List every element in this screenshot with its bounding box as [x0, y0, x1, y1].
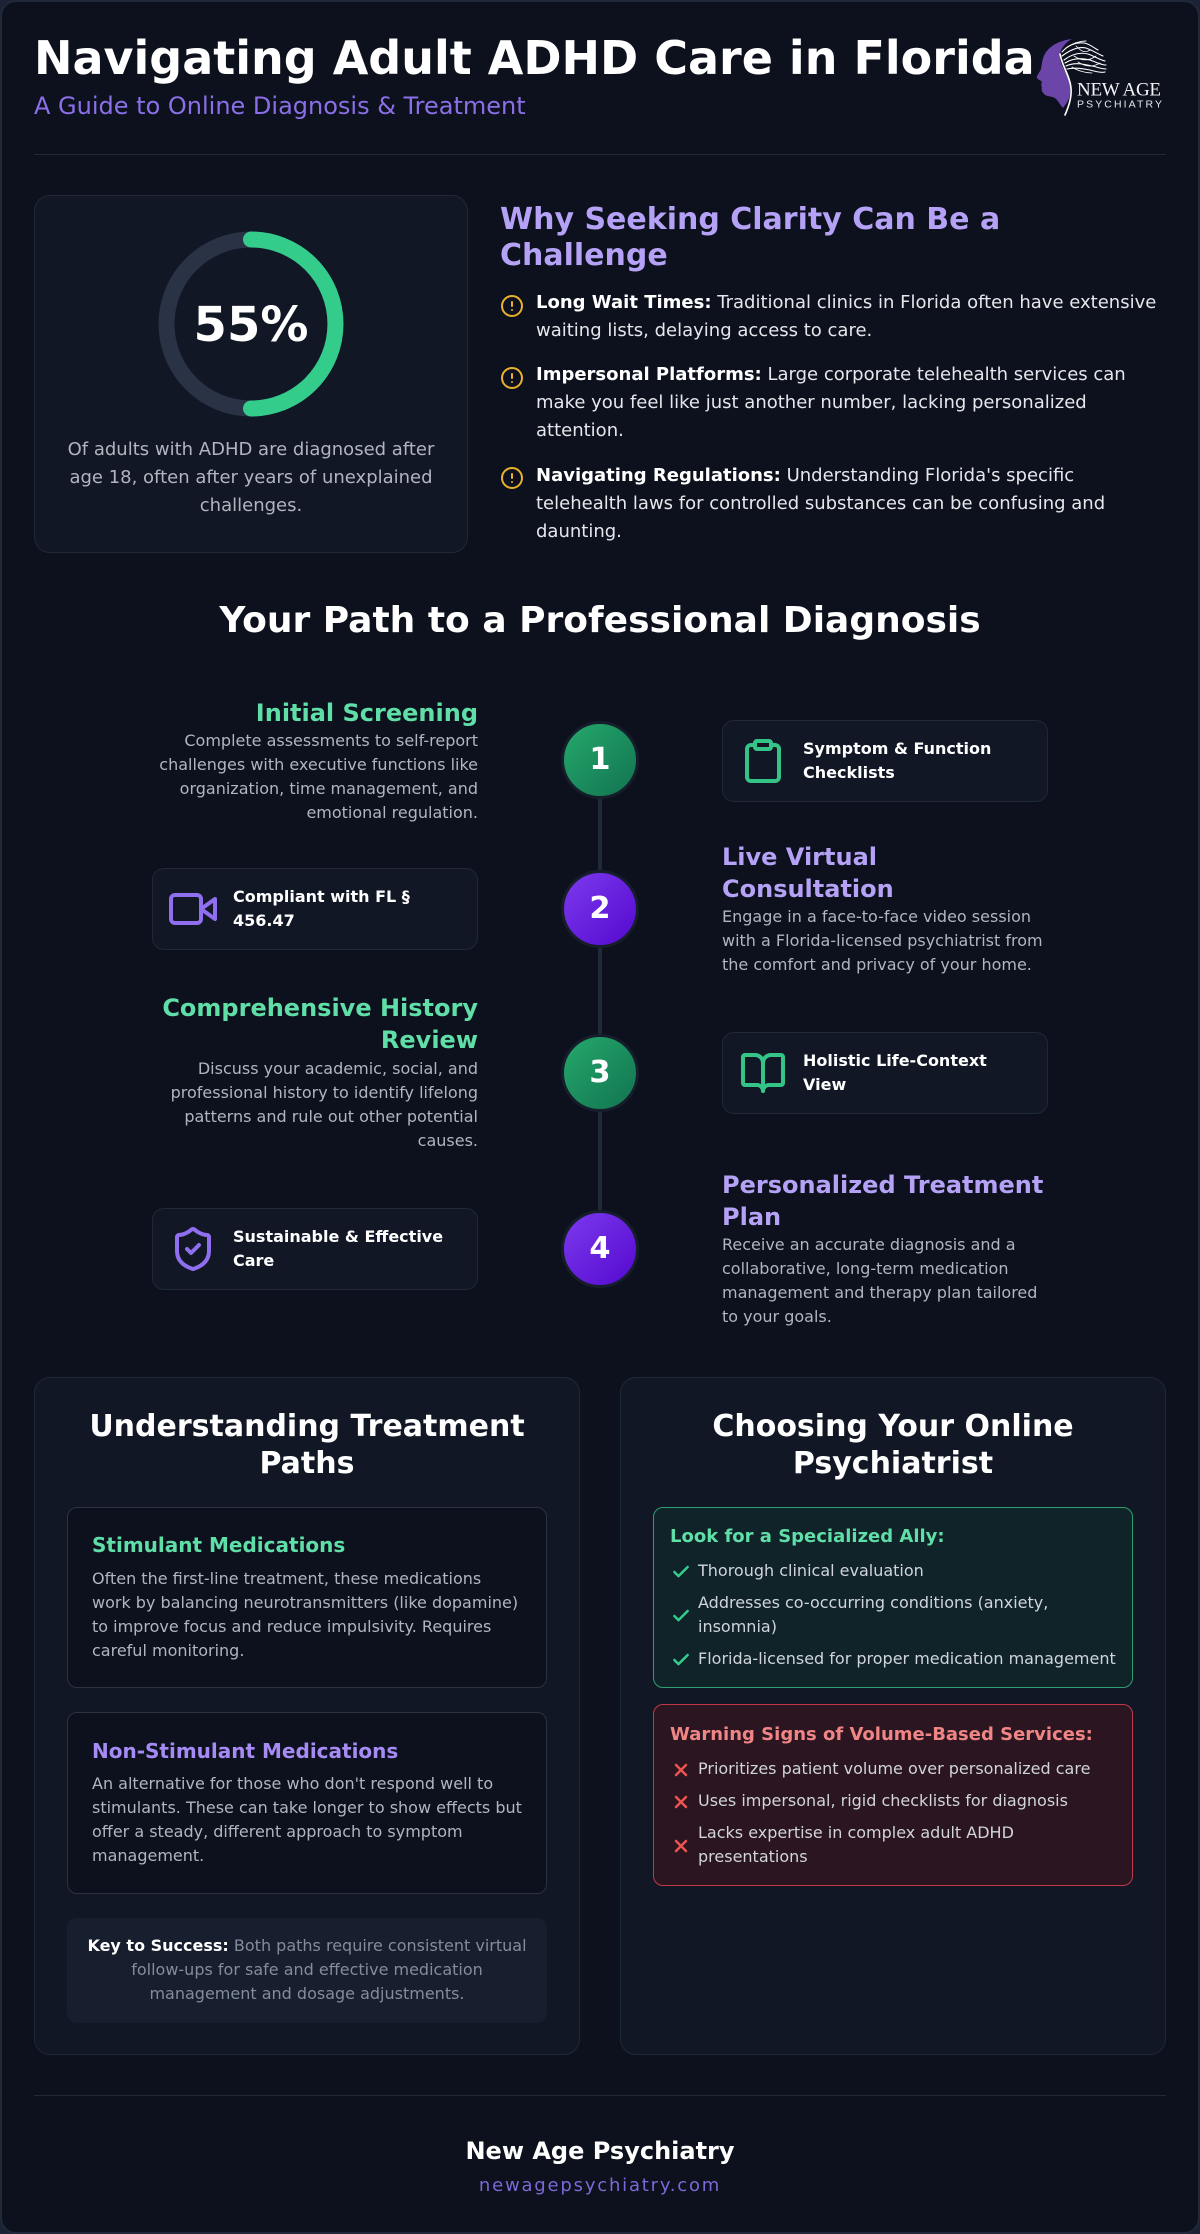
- icon: check: [673, 1610, 689, 1622]
- text: management and therapy plan tailored: [722, 1283, 1037, 1302]
- panel heading: Paths: [260, 1446, 354, 1480]
- list item: Addresses co-occurring conditions (anxiety,: [698, 1593, 1048, 1612]
- card label: Care: [233, 1251, 274, 1270]
- card body: [92, 1569, 518, 1660]
- timeline connector: [598, 760, 602, 1250]
- text: Live Virtual: [722, 843, 877, 871]
- challenge: impersonal platforms: Impersonal Platforms: Large corporate telehealth services can: [536, 364, 1126, 385]
- list item: insomnia): [698, 1617, 777, 1636]
- heading: your path: Your Path to a Professional Diagnosis: [219, 600, 981, 641]
- logo: New Age Psychiatry: PSYCHIATRY: [1077, 98, 1162, 110]
- list item: [698, 1823, 1014, 1866]
- text: Personalized Treatment: [722, 1171, 1043, 1199]
- text: Complete assessments to self-report: [184, 731, 478, 750]
- text: emotional regulation.: [306, 803, 478, 822]
- icon: alert navigating regulations: [501, 467, 523, 489]
- challenge: long wait times: waiting lists, delaying access to care.: [536, 320, 872, 341]
- logo: New Age Psychiatry: [1036, 39, 1162, 116]
- icon: check: [673, 1654, 689, 1666]
- card label: [233, 1227, 443, 1270]
- text: Initial Screening: [256, 699, 478, 727]
- list item: Lacks expertise in complex adult ADHD: [698, 1823, 1014, 1842]
- step 4 text: [722, 1171, 1043, 1326]
- text: to your goals.: [722, 1307, 832, 1326]
- list item: Prioritizes patient volume over personalized care: [698, 1759, 1090, 1778]
- text: patterns and rule out other potential: [184, 1107, 478, 1126]
- card body: stimulants. These can take longer to show effects but: [92, 1798, 522, 1817]
- box title: Look for a Specialized Ally:: [670, 1526, 945, 1547]
- challenge: impersonal platforms: make you feel like just another number, lacking personalized: [536, 392, 1087, 413]
- panel heading: [712, 1409, 1074, 1480]
- box: specialized ally: [653, 1507, 1133, 1688]
- step 2 number: 2: [589, 891, 611, 926]
- challenge: long wait times: Long Wait Times: Traditional clinics in Florida often have extensive: [536, 292, 1156, 313]
- card label: Sustainable & Effective: [233, 1227, 443, 1246]
- challenge list: [501, 292, 1156, 542]
- card label: Holistic Life-Context: [803, 1051, 987, 1070]
- subtitle: A Guide to Online Diagnosis & Treatment: [34, 92, 526, 120]
- callout: key to success: management and dosage adjustments.: [149, 1984, 465, 2003]
- heading: why seeking clarity: Challenge: [500, 238, 668, 273]
- panel heading: Understanding Treatment: [89, 1409, 525, 1444]
- box: warning signs: [653, 1704, 1133, 1886]
- card body: An alternative for those who don't respond well to: [92, 1774, 493, 1793]
- card label: [803, 739, 991, 782]
- step 2 card: [152, 868, 478, 950]
- text: with a Florida-licensed psychiatrist from: [722, 931, 1043, 950]
- challenge: navigating regulations: Navigating Regulations: Understanding Florida's specific: [536, 465, 1074, 486]
- icon: open book: [741, 1053, 785, 1093]
- logo: New Age Psychiatry: NEW AGE: [1077, 80, 1161, 100]
- panel heading: Choosing Your Online: [712, 1409, 1074, 1444]
- list item: [698, 1593, 1048, 1636]
- step 1 number: [561, 721, 639, 799]
- card label: Checklists: [803, 763, 895, 782]
- list item: Thorough clinical evaluation: [698, 1561, 924, 1580]
- card title: Non-Stimulant Medications: [92, 1739, 398, 1763]
- text: Comprehensive History: [162, 994, 478, 1022]
- step 1 text: [159, 699, 478, 822]
- step 2 number: [561, 870, 639, 948]
- text: causes.: [418, 1131, 478, 1150]
- card body: careful monitoring.: [92, 1641, 244, 1660]
- text: Discuss your academic, social, and: [198, 1059, 478, 1078]
- text: professional history to identify lifelong: [171, 1083, 478, 1102]
- card body: management.: [92, 1846, 204, 1865]
- box title: Warning Signs of Volume-Based Services:: [670, 1724, 1093, 1745]
- step 3 number: 3: [589, 1055, 611, 1090]
- text: the comfort and privacy of your home.: [722, 955, 1032, 974]
- timeline: [598, 799, 602, 1210]
- heading: why seeking clarity: [500, 202, 1000, 273]
- heading: why seeking clarity: Why Seeking Clarity Can Be a: [500, 202, 1000, 237]
- panel: 55% statistic: [34, 195, 468, 553]
- challenge: long wait times: [536, 292, 1156, 341]
- card body: work by balancing neurotransmitters (like dopamine): [92, 1593, 518, 1612]
- icon: alert impersonal platforms: [501, 367, 523, 389]
- card label: 456.47: [233, 911, 295, 930]
- card label: Symptom & Function: [803, 739, 991, 758]
- card body: [92, 1774, 522, 1865]
- challenge: navigating regulations: daunting.: [536, 521, 622, 542]
- callout: key to success: follow-ups for safe and effective medication: [131, 1960, 483, 1979]
- icon: cross: [674, 1796, 688, 1808]
- icon: cross: [674, 1840, 688, 1852]
- list item: Florida-licensed for proper medication management: [698, 1649, 1116, 1668]
- icon: cross: [674, 1764, 688, 1776]
- text: collaborative, long-term medication: [722, 1259, 1008, 1278]
- card body: to improve focus and reduce impulsivity. Requires: [92, 1617, 491, 1636]
- card body: offer a steady, different approach to symptom: [92, 1822, 463, 1841]
- challenge: impersonal platforms: attention.: [536, 420, 624, 441]
- list item: presentations: [698, 1847, 808, 1866]
- panel heading: [89, 1409, 525, 1480]
- panel heading: Psychiatrist: [793, 1446, 993, 1480]
- card: non-stimulant medications: [67, 1712, 547, 1894]
- card label: View: [803, 1075, 846, 1094]
- card label: [233, 887, 410, 930]
- step 4 number: 4: [589, 1231, 611, 1266]
- statistic caption: [68, 439, 434, 516]
- list item: Uses impersonal, rigid checklists for diagnosis: [698, 1791, 1068, 1810]
- step 2 text: [722, 843, 1043, 974]
- step 3 text: [162, 994, 478, 1150]
- icon: check: [673, 1566, 689, 1578]
- icon: video camera: [169, 893, 217, 925]
- donut chart: 55%: 55%: [194, 297, 308, 353]
- card title: Stimulant Medications: [92, 1533, 345, 1557]
- footer: website: newagepsychiatry.com: [479, 2175, 721, 2196]
- text: Engage in a face-to-face video session: [722, 907, 1031, 926]
- panel: choosing your online psychiatrist: [620, 1377, 1166, 2055]
- callout: key to success: [67, 1918, 547, 2023]
- callout: key to success: Key to Success: Both paths require consistent virtual: [87, 1936, 527, 1955]
- text: organization, time management, and: [180, 779, 478, 798]
- step 1 number: 1: [589, 742, 611, 777]
- step 3 card: [722, 1032, 1048, 1114]
- panel: understanding treatment paths: [34, 1377, 580, 2055]
- step 3 number: [561, 1034, 639, 1112]
- challenge: impersonal platforms: [536, 364, 1126, 441]
- text: Receive an accurate diagnosis and a: [722, 1235, 1016, 1254]
- donut chart: 55%: [158, 232, 344, 416]
- card label: Compliant with FL §: [233, 887, 410, 906]
- challenge: navigating regulations: telehealth laws for controlled substances can be confusing and: [536, 493, 1105, 514]
- text: challenges with executive functions like: [159, 755, 478, 774]
- statistic caption: challenges.: [200, 495, 302, 516]
- text: Consultation: [722, 875, 894, 903]
- icon: clipboard: [745, 739, 781, 783]
- step 4 number: [561, 1210, 639, 1288]
- step 1 card: [722, 720, 1048, 802]
- step 4 card: [152, 1208, 478, 1290]
- statistic caption: Of adults with ADHD are diagnosed after: [68, 439, 434, 460]
- card body: Often the first-line treatment, these medications: [92, 1569, 481, 1588]
- footer: brand name: New Age Psychiatry: [465, 2137, 735, 2165]
- card label: [803, 1051, 987, 1094]
- title: Navigating Adult ADHD Care in Florida: [34, 31, 1035, 85]
- statistic caption: age 18, often after years of unexplained: [69, 467, 433, 488]
- icon: shield check: [175, 1227, 211, 1271]
- challenge: navigating regulations: [536, 465, 1105, 542]
- card: stimulant medications: [67, 1507, 547, 1688]
- text: Plan: [722, 1203, 781, 1231]
- text: Review: [381, 1026, 478, 1054]
- icon: alert long wait: [501, 295, 523, 317]
